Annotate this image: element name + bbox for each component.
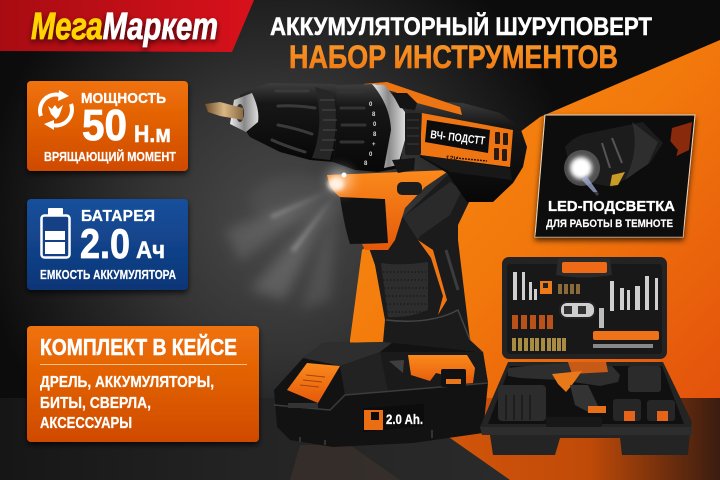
kit list: БИТЫ, СВЕРЛА, [40,395,151,412]
kit list: АКСЕССУАРЫ [40,415,132,432]
case handle [562,262,607,273]
drill badge [425,120,490,153]
light beam [225,175,350,310]
kit list [40,374,214,432]
kit heading: КОМПЛЕКТ В КЕЙСЕ [40,333,237,360]
drill rear housing [413,100,527,202]
case screwdriver [593,331,659,340]
drill dial marks: 8 [373,132,377,138]
kit list: ДРЕЛЬ, АККУМУЛЯТОРЫ, [40,374,214,391]
panel: power [27,81,188,171]
power label: МОЩНОСТЬ [81,90,166,107]
case base [480,362,692,455]
battery label plate [363,404,424,432]
case batteries [498,385,546,421]
title: АККУМУЛЯТОРНЫЙ ШУРУПОВЕРТ [270,11,652,41]
panel: battery [27,199,188,290]
drill dial marks: 0 [373,122,377,128]
battery value: 2.0 [80,220,130,267]
led flash [328,168,352,192]
drill dial marks [364,102,377,167]
case mini drill [508,362,620,413]
battery label: БАТАРЕЯ [81,208,155,225]
battery pack [274,342,488,447]
logo text: МегаМаркет [31,6,218,48]
tool case [480,257,692,455]
drill dial marks: 8 [372,112,376,118]
drill dial marks: + [372,142,376,148]
drill dial marks: 0 [369,102,373,108]
battery caption: ЕМКОСТЬ АККУМУЛЯТОРА [40,268,176,282]
battery unit: Ач [136,237,165,264]
drill side panel [420,113,513,167]
drill collar [312,87,336,160]
inset light [564,150,600,196]
drill button [397,182,422,195]
title [270,11,652,75]
drill vents [494,132,508,161]
drill top orange [363,82,462,115]
drill badge: ВЧ- ПОДСТТ [430,129,486,148]
case badge [560,302,595,318]
inset caption band [535,192,686,237]
drill handle [368,170,483,352]
power value: 50 [82,101,127,150]
inset caption: ДЛЯ РАБОТЫ В ТЕМНОТЕ [546,218,673,230]
drill chuck [240,83,337,162]
inset chuck [565,122,663,187]
drill [205,82,527,352]
drill bit [205,102,243,120]
drill gear section [333,84,405,172]
drill dial marks: 0 [369,152,373,158]
drill chuck nose [230,93,258,132]
drill silver ring [372,84,405,168]
battery latch left [287,363,340,403]
battery label plate: 2.0 Ah. [386,411,423,427]
drill trigger [340,197,388,244]
case lid [502,257,667,359]
power caption: ВРЯЩАЮЩИЙ МОМЕНТ [44,149,176,164]
drill clips [392,93,417,110]
power unit: Н.м [134,121,171,148]
icon: battery [42,208,70,258]
icon: torque [40,90,72,130]
inset title: LED-ПОДСВЕТКА [548,198,675,215]
logo banner [0,0,254,52]
drill dial marks: 8 [364,161,368,167]
battery latch right [408,355,475,385]
panel: kit [27,326,259,442]
drill orange grip [327,170,450,250]
drill voltage mark: 12V [445,155,459,163]
led inset [535,115,695,237]
subtitle: НАБОР ИНСТРУМЕНТОВ [289,39,618,75]
